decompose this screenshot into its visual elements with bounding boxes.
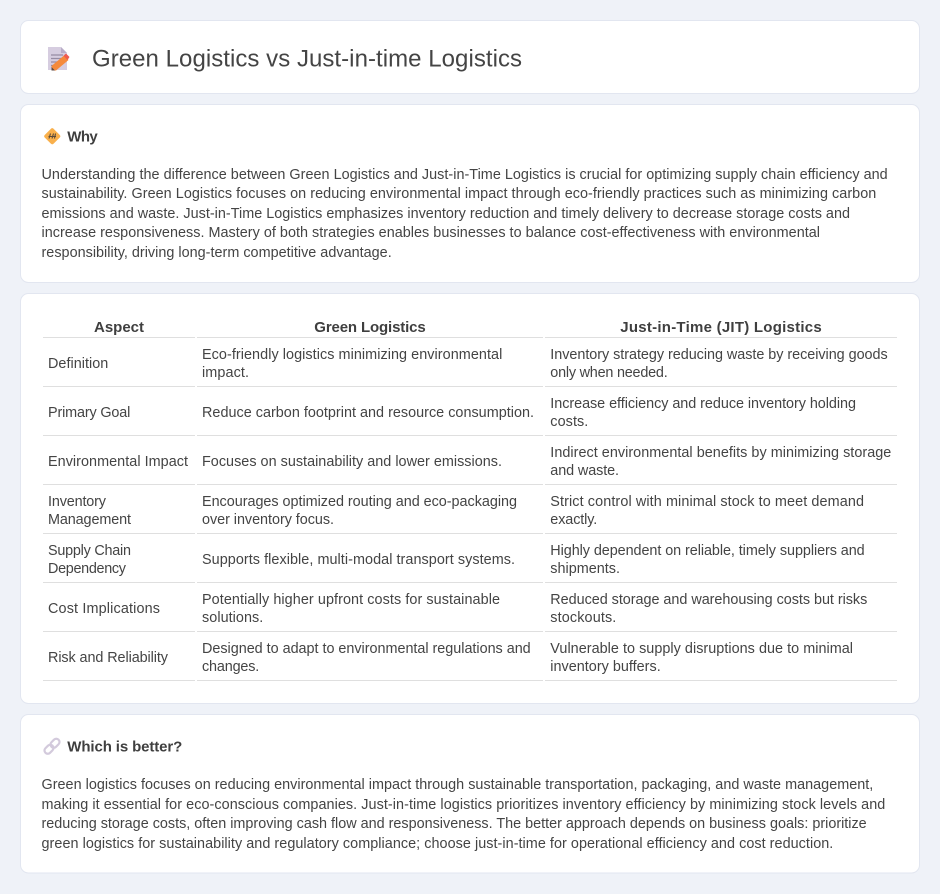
heading: which is better: Which is better? <box>67 739 182 756</box>
row: definition: Inventory strategy reducing waste by receiving goods <box>550 347 888 363</box>
icon: document with pencil <box>48 47 70 70</box>
row: supply chain dependency: Supply Chain <box>48 543 131 559</box>
text block: which is better paragraph: Green logistics focuses on reducing environmental impact through sustainable transportation, packaging, and waste management, <box>42 777 873 793</box>
row: primary goal <box>48 396 856 430</box>
panel: title header <box>20 20 920 94</box>
row: risk and reliability: inventory buffers. <box>550 659 661 675</box>
text block: why paragraph: emissions and waste. Just-in-Time Logistics emphasizes inventory reduction and timely delivery to decrease storage costs and <box>42 206 850 222</box>
row: definition: Eco-friendly logistics minimizing environmental <box>202 347 502 363</box>
row: risk and reliability: changes. <box>202 659 259 675</box>
row: definition <box>48 347 888 381</box>
row: environmental impact: Environmental Impact <box>48 454 188 470</box>
row: inventory management: Encourages optimized routing and eco-packaging <box>202 494 517 510</box>
icon: chain link <box>43 737 61 755</box>
row: cost implications: stockouts. <box>550 610 616 626</box>
row: definition: Definition <box>48 356 108 372</box>
row: inventory management: Management <box>48 512 131 528</box>
row: cost implications: Cost Implications <box>48 601 160 617</box>
text block: which is better paragraph <box>42 777 885 852</box>
row: supply chain dependency: Dependency <box>48 561 127 577</box>
row: inventory management: Strict control with minimal stock to meet demand <box>550 494 864 510</box>
panel: why <box>20 104 920 282</box>
row: risk and reliability: Designed to adapt to environmental regulations and <box>202 641 531 657</box>
row: primary goal: Reduce carbon footprint and resource consumption. <box>202 405 534 421</box>
row: risk and reliability <box>48 641 853 675</box>
text block: why paragraph: increase responsiveness. Mastery of both strategies enables businesses to balance cost-effectiveness with environmental <box>42 225 820 241</box>
row: supply chain dependency: Supports flexible, multi-modal transport systems. <box>202 552 515 568</box>
row: primary goal: Increase efficiency and reduce inventory holding <box>550 396 856 412</box>
text block: which is better paragraph: making it essential for eco-conscious companies. Just-in-time logistics prioritizes inventory efficiency by minimizing stock levels and <box>42 797 885 813</box>
table header row: Green Logistics <box>314 319 426 336</box>
row: risk and reliability: Risk and Reliability <box>48 650 169 666</box>
text block: why paragraph: Understanding the difference between Green Logistics and Just-in-Time Logistics is crucial for optimizing supply chain efficiency and <box>42 167 888 183</box>
row: inventory management: exactly. <box>550 512 597 528</box>
row: inventory management: over inventory focus. <box>202 512 334 528</box>
row: environmental impact: Focuses on sustainability and lower emissions. <box>202 454 502 470</box>
text block: why paragraph: sustainability. Green Logistics focuses on reducing environmental impact through eco-friendly practices such as minimizing carbon <box>42 186 876 202</box>
row: cost implications <box>48 592 867 626</box>
row: cost implications: Potentially higher upfront costs for sustainable <box>202 592 500 608</box>
heading: why: Why <box>67 129 98 146</box>
row: cost implications: solutions. <box>202 610 263 626</box>
table header row: Just-in-Time (JIT) Logistics <box>620 319 822 336</box>
row: supply chain dependency: shipments. <box>550 561 620 577</box>
row: supply chain dependency: Highly dependent on reliable, timely suppliers and <box>550 543 865 559</box>
icon: orange diamond sign <box>43 127 61 145</box>
title: Green Logistics vs Just-in-time Logistics <box>92 46 522 72</box>
row: environmental impact <box>48 445 891 479</box>
row: primary goal: costs. <box>550 414 588 430</box>
text block: why paragraph <box>42 167 888 261</box>
row: supply chain dependency <box>48 543 865 577</box>
row: inventory management <box>48 494 864 528</box>
row: risk and reliability: Vulnerable to supply disruptions due to minimal <box>550 641 853 657</box>
text block: why paragraph: responsibility, driving long-term competitive advantage. <box>42 245 392 261</box>
text block: which is better paragraph: reducing storage costs, often improving cash flow and responsiveness. The better approach depends on business goals: prioritize <box>42 816 867 832</box>
row: cost implications: Reduced storage and warehousing costs but risks <box>550 592 867 608</box>
table header row: Aspect <box>94 319 144 336</box>
row: environmental impact: Indirect environmental benefits by minimizing storage <box>550 445 891 461</box>
panel: comparison table <box>20 294 920 704</box>
panel: which is better <box>20 714 920 873</box>
row: definition: only when needed. <box>550 365 668 381</box>
row: inventory management: Inventory <box>48 494 107 510</box>
row: primary goal: Primary Goal <box>48 405 130 421</box>
text block: which is better paragraph: green logistics for sustainability and regulatory compliance; choose just-in-time for operational efficiency and cost reduction. <box>42 836 833 852</box>
table header row <box>94 319 822 336</box>
row: environmental impact: and waste. <box>550 463 619 479</box>
row: definition: impact. <box>202 365 249 381</box>
